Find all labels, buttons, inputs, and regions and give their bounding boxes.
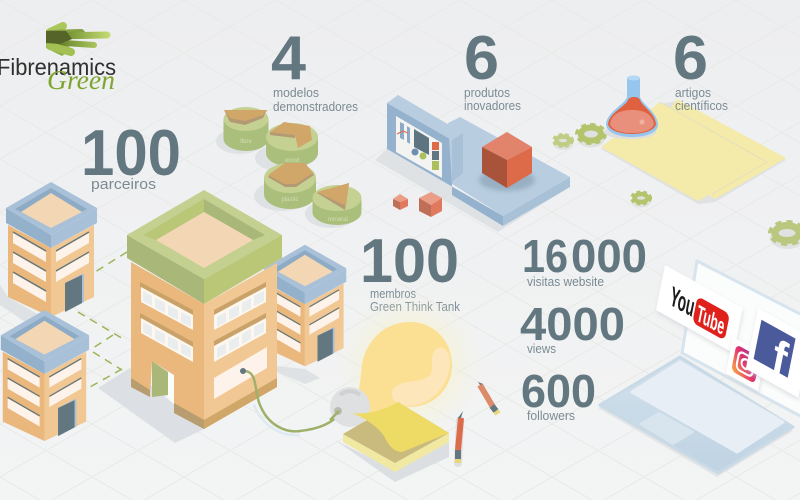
flask	[604, 76, 658, 139]
stat: 4 modelos demonstradores: modelos	[273, 85, 319, 100]
cable from building to bulb	[240, 368, 340, 435]
Facebook card	[745, 308, 800, 400]
stat: 100 membros Green Think Tank: membros	[370, 286, 416, 301]
stat: 6 produtos inovadores: 6	[464, 24, 499, 93]
main building windows	[140, 282, 267, 399]
pencil: tilted	[478, 382, 498, 414]
stat: 600 followers: 600	[521, 365, 596, 417]
stat: 6 artigos científicos: artigos	[675, 85, 711, 100]
stat: 4000 views: 4000	[520, 298, 625, 350]
cylinder: fibre	[216, 107, 268, 154]
partner building: bottom left	[1, 310, 89, 441]
stat: 6 produtos inovadores: produtos	[464, 85, 510, 100]
gear: medium	[577, 125, 605, 148]
scientific papers	[601, 99, 786, 204]
stat: 100 parceiros: 100	[81, 116, 181, 189]
cylinder: mineral: mineral	[328, 217, 348, 223]
stat: 100 membros Green Think Tank: Green Think Tank	[370, 299, 460, 314]
Facebook card: f	[768, 328, 792, 387]
cylinder: plastic	[254, 163, 316, 211]
cylinder: wood: wood	[284, 158, 299, 164]
logo: Fibrenamics Green	[0, 23, 116, 95]
laptop screen	[682, 261, 800, 418]
pencil: upright	[458, 411, 463, 463]
stat: 4 modelos demonstradores: demonstradores	[273, 99, 358, 114]
YouTube card: You	[668, 281, 697, 323]
stat: 6 produtos inovadores	[464, 24, 521, 113]
stat: 16000 visitas website: 16	[522, 230, 568, 282]
dashed connection lines	[78, 252, 127, 387]
YouTube card: Tube	[695, 300, 727, 340]
stat: 100 membros Green Think Tank: 100	[360, 227, 459, 296]
gear: small left	[553, 134, 573, 150]
stat: 4000 views: views	[527, 341, 556, 356]
sticky notes	[335, 402, 449, 482]
main building green roof	[127, 190, 282, 304]
cylinder: plastic: plastic	[281, 197, 299, 203]
stat: 4 modelos demonstradores: 4	[271, 24, 307, 93]
stat: 100 parceiros: parceiros	[91, 176, 156, 193]
logo: Fibrenamics Green: Green	[47, 65, 115, 95]
gear: small lower	[631, 192, 651, 208]
main building	[98, 190, 282, 443]
gear: large right	[770, 222, 800, 249]
stat: 16000 visitas website: visitas website	[527, 274, 604, 289]
stat: 16000 visitas website: 000	[571, 230, 647, 282]
stat text over papers: científicos: científicos	[675, 98, 728, 113]
machine: production line with control panel	[375, 95, 570, 232]
cylinders: material models	[216, 107, 362, 228]
stat: 6 artigos científicos: 6	[673, 24, 708, 93]
control panel	[396, 116, 442, 178]
laptop base	[598, 357, 793, 477]
light bulb	[330, 287, 488, 443]
Instagram card	[725, 337, 766, 394]
partner building: top left	[0, 182, 97, 325]
stat: 600 followers: followers	[527, 408, 575, 423]
cylinder: wood	[255, 122, 318, 172]
YouTube card	[656, 265, 744, 356]
big red cube	[479, 132, 535, 191]
cylinder: mineral	[305, 183, 362, 228]
partner building: right	[264, 245, 346, 384]
stat: 6 produtos inovadores: inovadores	[464, 98, 521, 113]
stat: 4 modelos demonstradores	[271, 24, 358, 114]
logo: Fibrenamics Green: Fibrenamics	[0, 54, 116, 80]
stat: 16000 visitas website	[522, 230, 647, 289]
small red cubes	[393, 192, 442, 217]
laptop	[598, 261, 800, 477]
cylinder: fibre: fibre	[240, 139, 252, 145]
